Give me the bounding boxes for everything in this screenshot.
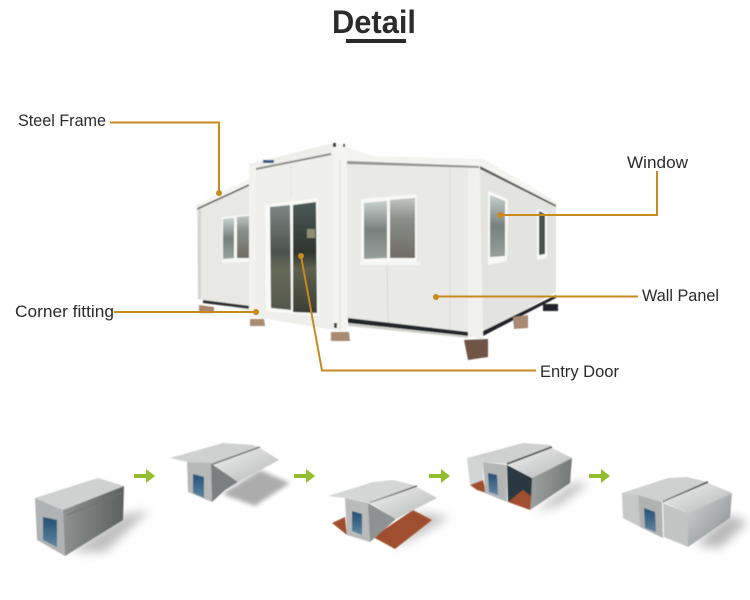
- callout: Corner fitting: [15, 302, 259, 321]
- callout: Entry Door: [298, 253, 619, 381]
- arrow 2: [294, 469, 315, 483]
- folding step 4: walls raised: [467, 443, 590, 512]
- folding step 3: floor lowered: [328, 480, 450, 549]
- callout: Window: Window: [627, 153, 689, 172]
- house illustration: [195, 143, 558, 360]
- callout: Corner fitting: Corner fitting: [15, 302, 114, 321]
- callout: Steel Frame: [18, 111, 222, 196]
- title: Detail: [332, 4, 416, 40]
- callout: Wall Panel: [433, 286, 719, 305]
- callout: Entry Door: Entry Door: [540, 362, 619, 381]
- callout: Wall Panel: Wall Panel: [642, 286, 719, 305]
- folding step 2: roof and wall unfolding: [170, 443, 290, 506]
- callout: Steel Frame: Steel Frame: [18, 111, 106, 130]
- callout: Window: [497, 153, 689, 218]
- folding step 1: closed container: [35, 478, 150, 556]
- arrow 3: [429, 469, 450, 483]
- arrow 4: [589, 469, 610, 483]
- arrow 1: [134, 469, 155, 483]
- folding step 5: fully expanded: [622, 477, 748, 548]
- foundation blocks: [250, 304, 558, 360]
- right wall: [480, 158, 557, 336]
- center section with door: [249, 143, 347, 331]
- left wing: [195, 179, 250, 313]
- main front wall: [347, 147, 483, 342]
